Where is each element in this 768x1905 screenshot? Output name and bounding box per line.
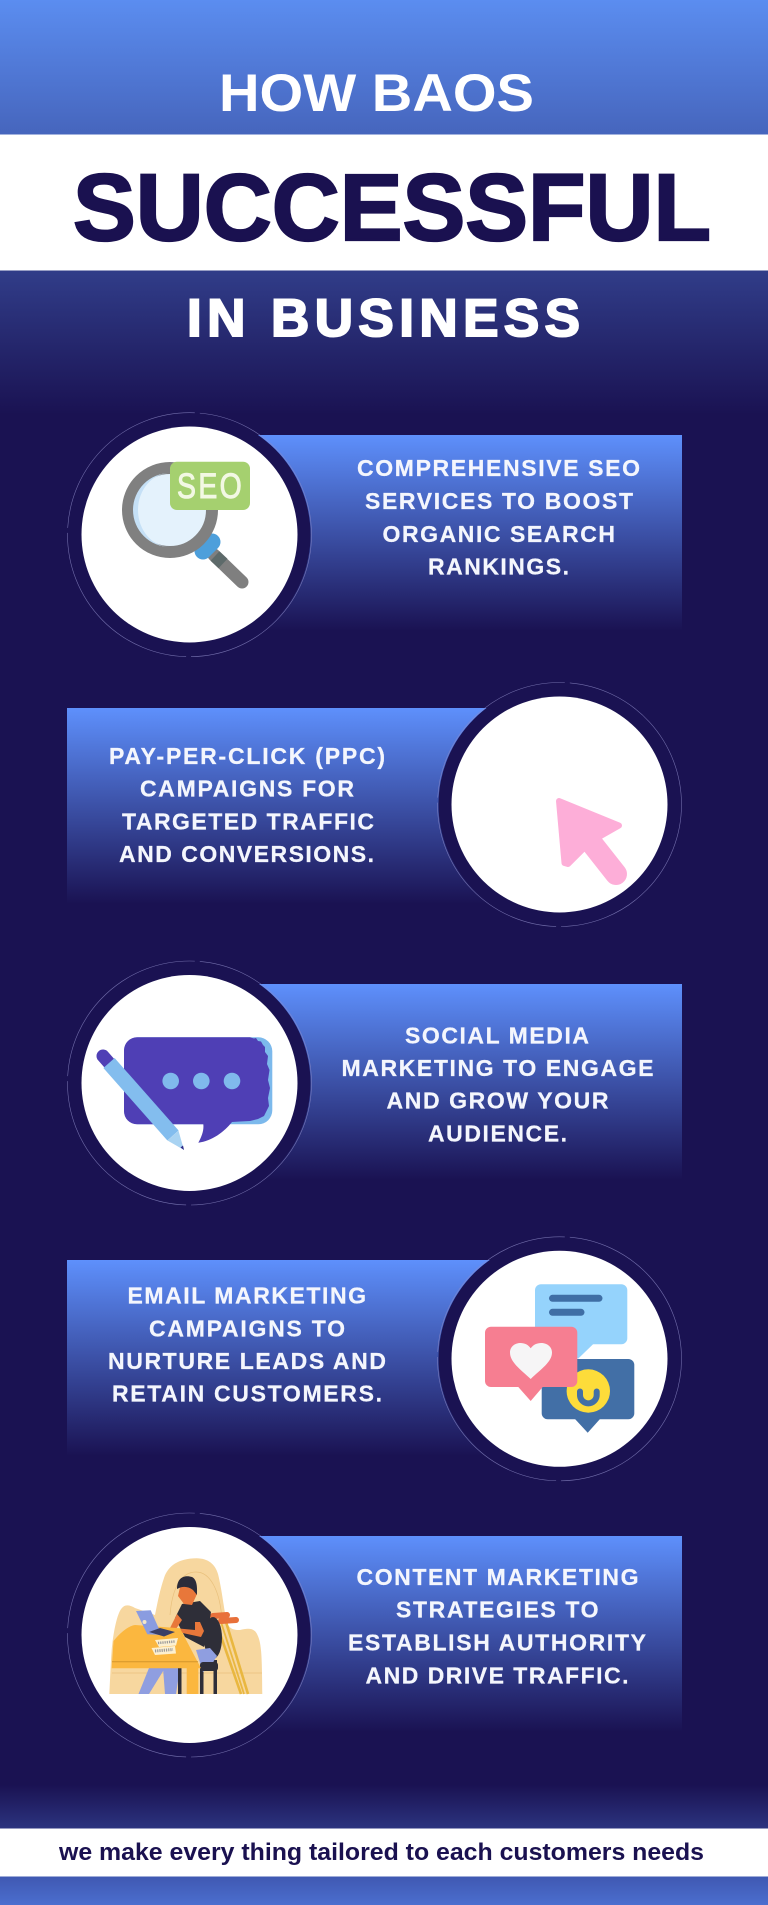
icon: person working at laptop — [109, 1558, 262, 1694]
panel background — [67, 1260, 560, 1456]
panel: social media — [68, 961, 682, 1205]
text block: MARKETING TO ENGAGE — [342, 1055, 654, 1081]
icon circle — [438, 682, 682, 926]
icon: speech bubble and pencil — [103, 1037, 272, 1150]
heading: in business: IN BUSINESS — [187, 289, 580, 348]
icon circle — [68, 413, 312, 657]
footer tagline: we make every thing tailored to each customers needs — [58, 1839, 704, 1866]
icon: magnifier with seo tag: SEO — [177, 466, 244, 506]
text block: AND CONVERSIONS. — [119, 841, 374, 867]
white title strip — [0, 134, 768, 270]
panel background — [189, 1536, 682, 1732]
panel background — [189, 435, 682, 631]
text block — [357, 455, 640, 580]
text block: TARGETED TRAFFIC — [122, 808, 374, 834]
text block: AUDIENCE. — [428, 1120, 567, 1146]
icon circle — [68, 1513, 312, 1757]
text block — [109, 743, 385, 867]
text block: RETAIN CUSTOMERS. — [112, 1381, 382, 1407]
text block: CAMPAIGNS FOR — [140, 776, 354, 802]
text block: RANKINGS. — [428, 554, 569, 580]
title band — [0, 64, 768, 348]
panel: ppc campaigns — [67, 682, 682, 926]
heading: successful: SUCCESSFUL — [73, 155, 711, 261]
icon circle — [68, 961, 312, 1205]
text block: PAY-PER-CLICK (PPC) — [109, 743, 385, 769]
text block: STRATEGIES TO — [396, 1597, 598, 1623]
text block: AND DRIVE TRAFFIC. — [366, 1662, 628, 1688]
icon: pink cursor — [559, 801, 619, 874]
text block: ESTABLISH AUTHORITY — [348, 1630, 646, 1656]
panel: seo services — [68, 413, 682, 657]
icon: magnifier with seo tag — [128, 462, 250, 582]
icon: chat bubbles — [485, 1284, 634, 1433]
text block: ORGANIC SEARCH — [382, 521, 615, 547]
panel: email marketing — [67, 1237, 682, 1481]
text block: EMAIL MARKETING — [128, 1283, 366, 1309]
footer strip — [0, 1828, 768, 1876]
text block: NURTURE LEADS AND — [108, 1348, 386, 1374]
text block: COMPREHENSIVE SEO — [357, 455, 640, 481]
panel: content marketing — [68, 1513, 682, 1757]
text block: CONTENT MARKETING — [356, 1564, 638, 1590]
text block — [108, 1283, 386, 1407]
text block: SERVICES TO BOOST — [365, 488, 633, 514]
icon circle — [438, 1237, 682, 1481]
text block: AND GROW YOUR — [386, 1088, 609, 1114]
text block — [348, 1564, 646, 1688]
panel background — [67, 708, 560, 904]
panel background — [189, 984, 682, 1180]
text block: CAMPAIGNS TO — [149, 1315, 345, 1341]
text block — [342, 1022, 654, 1146]
heading: how baos: HOW BAOS — [219, 64, 534, 123]
text block: SOCIAL MEDIA — [405, 1022, 589, 1048]
